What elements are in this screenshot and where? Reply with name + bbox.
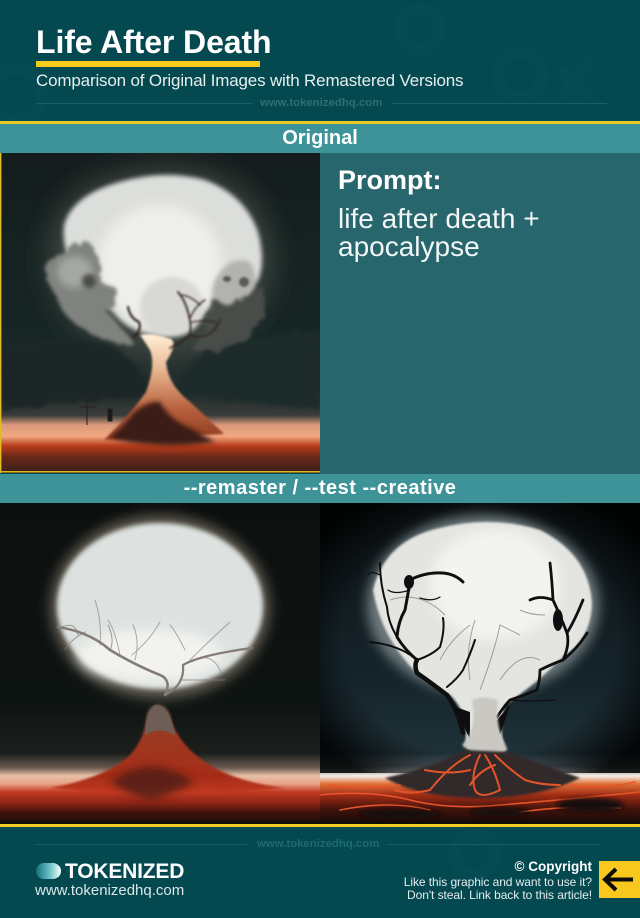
trunk [145, 705, 175, 735]
dark branches [128, 292, 220, 348]
left skull cloud [46, 243, 135, 345]
left skull highlight [57, 256, 93, 288]
band: original heading: Original [282, 127, 358, 149]
smoke halo [49, 168, 273, 361]
bottom edge [320, 821, 640, 824]
image: remaster left [0, 503, 320, 824]
watermark pattern [0, 0, 640, 121]
band: remaster heading: --remaster / --test --creative [184, 477, 456, 499]
pale branches [58, 600, 252, 695]
copyright note: Like this graphic and want to use it? [404, 875, 592, 889]
bright cloud centre [98, 205, 222, 325]
glowing lava veins [320, 755, 640, 812]
logo wordmark: TOKENIZED [65, 860, 184, 883]
image: original skull tree [0, 153, 320, 473]
background [320, 503, 640, 824]
black tree branches [368, 563, 587, 733]
mound [385, 750, 580, 798]
bright centre [430, 530, 560, 640]
right skull cloud [212, 260, 256, 318]
copyright heading: © Copyright [515, 859, 592, 874]
central dome [140, 277, 204, 337]
background sky and ground [0, 153, 320, 473]
moon disc [57, 523, 263, 689]
panel: prompt [320, 153, 640, 474]
yellow rule [0, 824, 640, 827]
title: Life After Death [36, 24, 271, 60]
image: remaster right [320, 503, 640, 824]
distant figure and cross [80, 400, 112, 425]
moon lower glow [78, 629, 222, 681]
prompt text: life after death + [338, 203, 540, 234]
copyright note: Don't steal. Link back to this article! [407, 888, 592, 902]
right skull eyes [223, 276, 249, 287]
branch knots [404, 575, 563, 740]
left yellow edge [0, 153, 1, 473]
moon halo [367, 515, 599, 695]
moon halo [50, 515, 270, 699]
dark smoke clouds [0, 330, 320, 410]
mound shadow [110, 767, 195, 800]
pale trunk roots [462, 698, 507, 756]
footer panel [0, 827, 640, 918]
band: remaster heading [0, 474, 640, 503]
skull silhouette [64, 175, 262, 335]
tree trunk and mound glow [104, 334, 224, 440]
prompt text: apocalypse [338, 231, 480, 262]
footer url: www.tokenizedhq.com [35, 882, 184, 899]
copyright block [404, 859, 592, 902]
header panel [0, 0, 640, 121]
band: original heading [0, 124, 640, 153]
watermark shape [420, 827, 520, 918]
dark ground patches [360, 798, 624, 819]
bottom yellow edge [0, 471, 320, 472]
prompt text [338, 203, 540, 262]
copyright note [404, 875, 592, 902]
website divider: www.tokenizedhq.com [257, 838, 379, 850]
title underline [36, 61, 260, 67]
icon: logo pill [36, 863, 61, 879]
right lower cloud [190, 285, 264, 354]
bottom edge [0, 820, 320, 824]
left skull eye [82, 274, 96, 288]
moon disc [373, 522, 592, 745]
pale thin branches [390, 597, 545, 690]
prompt label: Prompt: [338, 165, 442, 195]
background [0, 503, 320, 824]
logo [36, 860, 184, 883]
icon: arrow box [599, 861, 640, 898]
vignette [320, 503, 640, 773]
mound [50, 704, 285, 794]
subtitle: Comparison of Original Images with Remastered Versions [36, 71, 463, 90]
yellow rule [0, 121, 640, 124]
dark mound [110, 402, 215, 445]
website divider: www.tokenizedhq.com [260, 97, 382, 109]
